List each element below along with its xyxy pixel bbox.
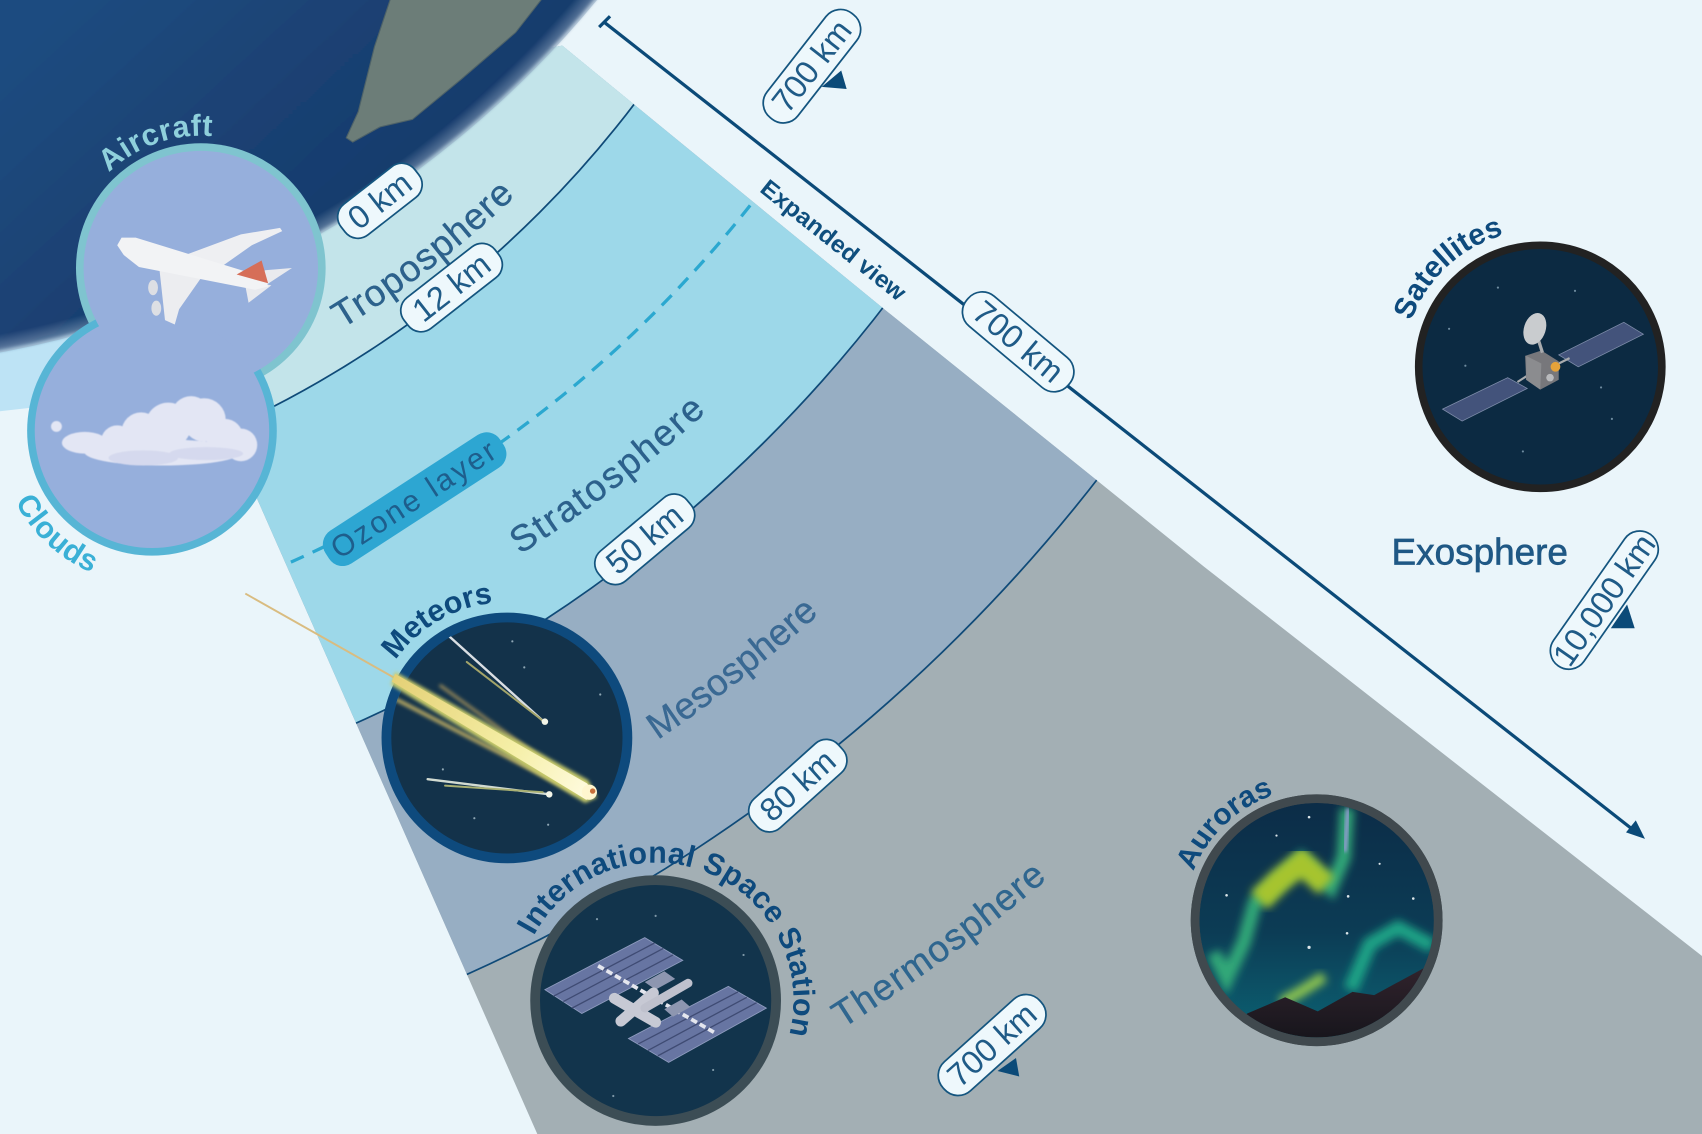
pill: 50 km bbox=[588, 487, 701, 591]
stars bbox=[596, 915, 745, 1097]
icon: main meteor bbox=[245, 594, 597, 803]
troposphere band bbox=[264, 46, 634, 407]
panel: auroras bbox=[1194, 799, 1444, 1053]
stars bbox=[442, 640, 601, 826]
pill: 0 km bbox=[331, 157, 429, 245]
heading: mesosphere: Mesosphere bbox=[646, 603, 816, 738]
land mass bbox=[346, 0, 543, 142]
earth bbox=[0, 0, 829, 370]
heading: thermosphere: Thermosphere bbox=[829, 868, 1044, 1024]
icon: aurora ribbons bbox=[1204, 805, 1433, 1038]
callout: 700 km top: 700 km bbox=[765, 13, 859, 119]
atmosphere band left of the circles bbox=[0, 326, 76, 411]
icon: small meteors bbox=[397, 632, 575, 794]
pill: 80 km: 80 km bbox=[753, 743, 843, 829]
stars bbox=[1448, 286, 1613, 453]
pill: 12 km: 12 km bbox=[405, 246, 497, 329]
label: satellites: Satellites bbox=[1394, 222, 1502, 318]
stratosphere band bbox=[257, 105, 884, 724]
panel: satellites bbox=[1419, 245, 1662, 488]
mesosphere band bbox=[257, 46, 1098, 976]
icon: mountains bbox=[1246, 968, 1424, 1038]
icon: cloud bbox=[51, 396, 257, 466]
scale line with arrow bbox=[599, 16, 1645, 839]
callout: 700 km thermosphere: 700 km bbox=[940, 996, 1044, 1094]
pill: 12 km bbox=[394, 237, 509, 338]
pill: 50 km: 50 km bbox=[599, 497, 690, 581]
pill: 700 km on scale line: 700 km bbox=[966, 294, 1071, 390]
pill: 0 km: 0 km bbox=[341, 165, 419, 237]
label: aircraft: Aircraft bbox=[102, 114, 212, 172]
ozone dashed line bbox=[291, 199, 755, 562]
icon: aircraft bbox=[117, 228, 292, 324]
ozone layer label: Ozone layer bbox=[325, 432, 504, 566]
panel: meteors bbox=[245, 594, 627, 858]
heading: exosphere: Exosphere bbox=[1392, 531, 1568, 572]
label: international space station: International Space Station bbox=[516, 844, 816, 1036]
icon: space station bbox=[545, 938, 766, 1062]
stars bbox=[1225, 816, 1415, 949]
pill: 80 km bbox=[742, 733, 854, 839]
callout: 10,000 km: 10,000 km bbox=[1546, 527, 1663, 673]
heading: troposphere: Troposphere bbox=[328, 186, 512, 324]
icon: satellite bbox=[1443, 310, 1643, 421]
heading: stratosphere: Stratosphere bbox=[510, 401, 703, 551]
panel: aircraft and clouds bbox=[27, 143, 326, 556]
panel: international space station bbox=[535, 880, 776, 1121]
label: expanded view: Expanded view bbox=[755, 175, 911, 307]
callout: 700 km top bbox=[756, 2, 868, 130]
label: meteors: Meteors bbox=[380, 588, 491, 658]
label: clouds: Clouds bbox=[18, 496, 96, 570]
label: auroras: Auroras bbox=[1178, 782, 1272, 871]
pill: 700 km on scale line bbox=[955, 284, 1081, 399]
